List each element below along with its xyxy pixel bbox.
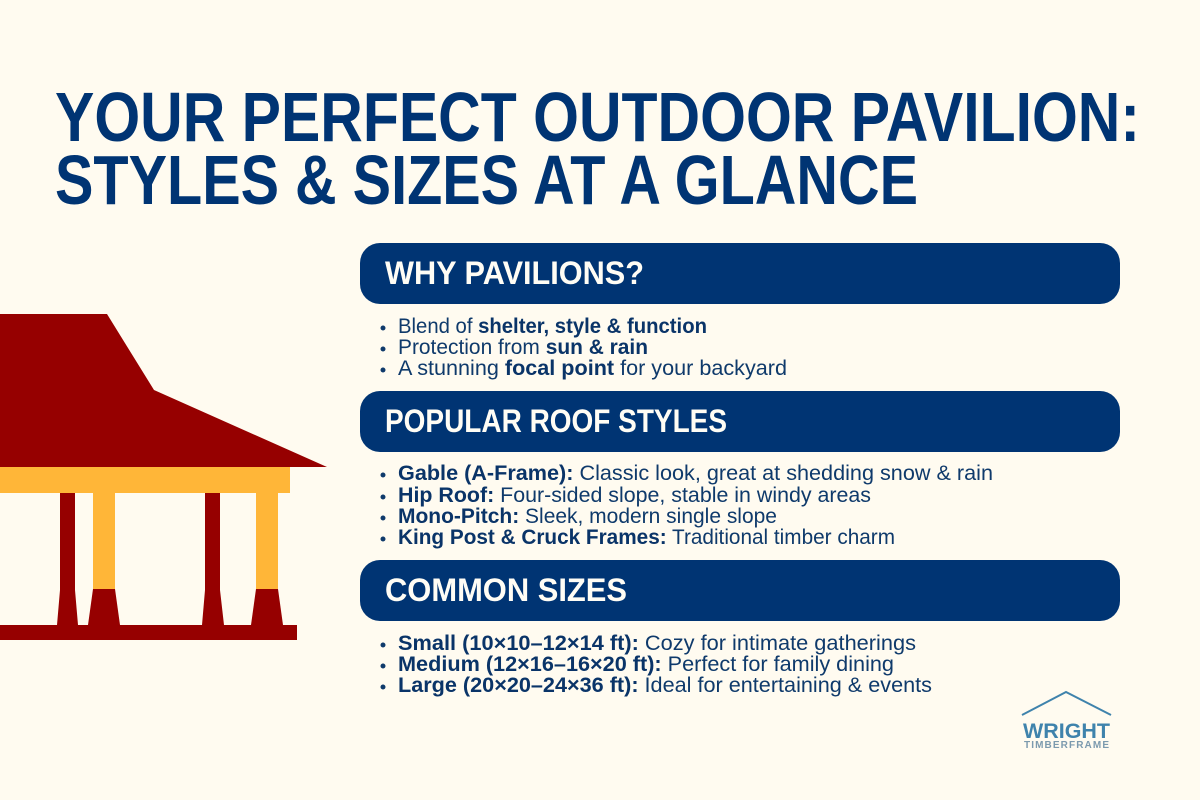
list: roof styles: Gable (A-Frame): Classic look, great at shedding snow & rain [398,462,993,485]
beam [0,467,290,493]
panel: common sizes [360,560,1120,697]
panel: popular roof styles [360,391,1120,549]
title [55,78,1140,219]
list: why pavilions: Blend of shelter, style & function [398,315,707,338]
heading: popular roof styles: POPULAR ROOF STYLES [385,403,727,439]
logo: Wright Timberframe [1022,692,1111,751]
floor [0,625,297,640]
post bases [88,589,283,625]
list: roof styles: King Post & Cruck Frames: Traditional timber charm [398,526,895,549]
outer posts [93,493,278,590]
logo: Wright Timberframe: TIMBERFRAME [1024,740,1109,751]
list: roof styles [380,462,993,549]
list: sizes: Small (10×10–12×14 ft): Cozy for intimate gatherings [398,632,916,655]
list: why pavilions: Protection from sun & rain [398,336,648,359]
heading: common sizes [360,560,1120,621]
heading: why pavilions [360,243,1120,304]
inner posts [57,493,224,625]
heading: common sizes: COMMON SIZES [385,572,627,608]
panel: why pavilions [360,243,1120,380]
heading: why pavilions: WHY PAVILIONS? [385,255,644,291]
illustration: pavilion [0,314,327,640]
list: roof styles: Hip Roof: Four-sided slope, stable in windy areas [398,484,871,507]
list: sizes: Large (20×20–24×36 ft): Ideal for entertaining & events [398,674,932,697]
icon: logo roof [1022,692,1111,715]
list: sizes: Medium (12×16–16×20 ft): Perfect for family dining [398,653,894,676]
list: why pavilions: A stunning focal point for your backyard [398,357,787,380]
list: sizes [380,632,932,697]
title: STYLES & SIZES AT A GLANCE [55,141,918,219]
list: roof styles: Mono-Pitch: Sleek, modern single slope [398,505,777,528]
logo: Wright Timberframe: WRIGHT [1023,720,1110,743]
roof [0,314,327,467]
heading: popular roof styles [360,391,1120,452]
list: why pavilions [380,315,787,380]
